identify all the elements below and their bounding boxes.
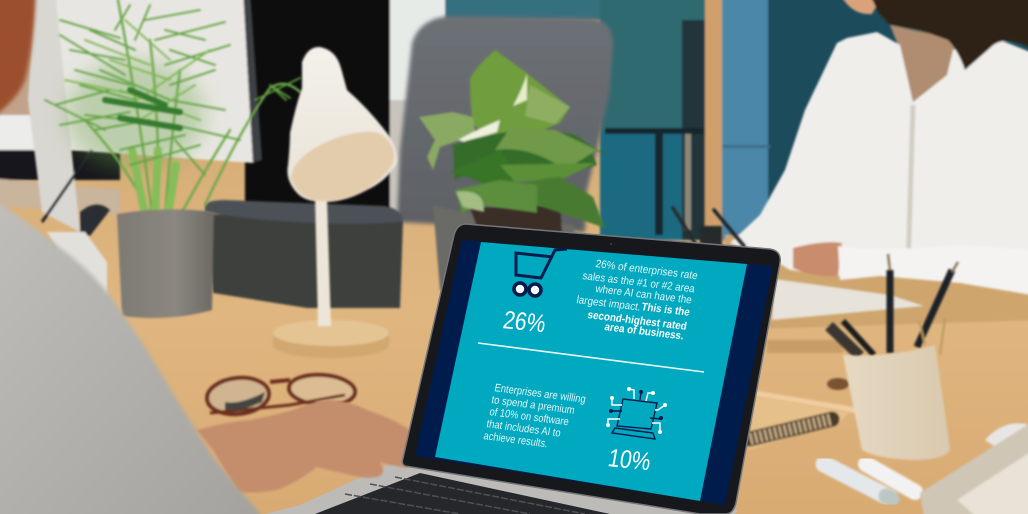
lamp stem bbox=[315, 198, 331, 326]
notebook with spiral bbox=[748, 396, 850, 450]
center plant leaves bbox=[419, 50, 618, 228]
laptop bbox=[402, 224, 780, 514]
pencil cup with pencils bbox=[829, 254, 958, 460]
back pencils bbox=[673, 208, 744, 246]
cup bbox=[843, 345, 950, 460]
text block: software premium: of 10% on software bbox=[488, 406, 570, 428]
text block: sales impact: 26% of enterprises rate bbox=[594, 258, 699, 282]
text block: software premium: Enterprises are willing bbox=[493, 382, 587, 406]
text block: sales impact: This is the bbox=[640, 301, 691, 319]
small palm plant with grey pot bbox=[45, 0, 300, 318]
icon: AI laptop bbox=[606, 387, 667, 439]
man's shoulder bbox=[0, 190, 275, 514]
lamp shade bbox=[287, 47, 397, 202]
screen teal panel bbox=[435, 242, 747, 501]
screen navy background bbox=[415, 240, 773, 505]
icon: shopping cart bbox=[514, 249, 567, 296]
stat: 26%: 26% bbox=[501, 306, 548, 338]
man's hand bbox=[197, 400, 410, 493]
text block: software premium: to spend a premium bbox=[490, 394, 576, 417]
stat: 10%: 10% bbox=[606, 444, 653, 476]
text block: sales impact: largest impact. bbox=[575, 294, 642, 314]
text block: sales impact: area of business. bbox=[603, 321, 685, 342]
white markers bbox=[824, 464, 915, 499]
laptop lid bbox=[402, 224, 780, 514]
text block: software premium: achieve results. bbox=[482, 430, 549, 450]
office chair bbox=[397, 16, 613, 232]
hair bbox=[868, 0, 1028, 70]
eyeglasses bbox=[205, 373, 356, 417]
laptop base and keyboard bbox=[265, 458, 738, 514]
text block: sales impact: where AI can have the bbox=[594, 283, 693, 306]
hair and skin bbox=[838, 0, 885, 14]
desk tray bbox=[920, 418, 1028, 514]
monitor and stand bbox=[28, 0, 262, 297]
lamp base bbox=[273, 332, 389, 358]
woman in white blouse bbox=[730, 0, 1028, 296]
text block: software premium bbox=[482, 382, 587, 450]
palm fronds bbox=[45, 0, 300, 215]
desk lamp bbox=[273, 47, 397, 358]
neck bbox=[890, 25, 960, 102]
desk paper bbox=[772, 279, 924, 320]
man's hair and beard bbox=[0, 0, 36, 125]
text block: sales impact: sales as the #1 or #2 area bbox=[581, 270, 697, 295]
blouse bbox=[730, 32, 1028, 296]
pens bbox=[829, 254, 958, 356]
center plant pot bbox=[433, 205, 575, 300]
pen box / cable organiser bbox=[205, 200, 403, 308]
divider line bbox=[478, 343, 704, 372]
text block: sales impact: second-highest rated bbox=[586, 309, 688, 333]
pot bbox=[117, 209, 214, 318]
text block: sales impact bbox=[575, 258, 699, 342]
text block: software premium: that includes AI to bbox=[485, 418, 562, 440]
webcam bbox=[610, 243, 612, 245]
